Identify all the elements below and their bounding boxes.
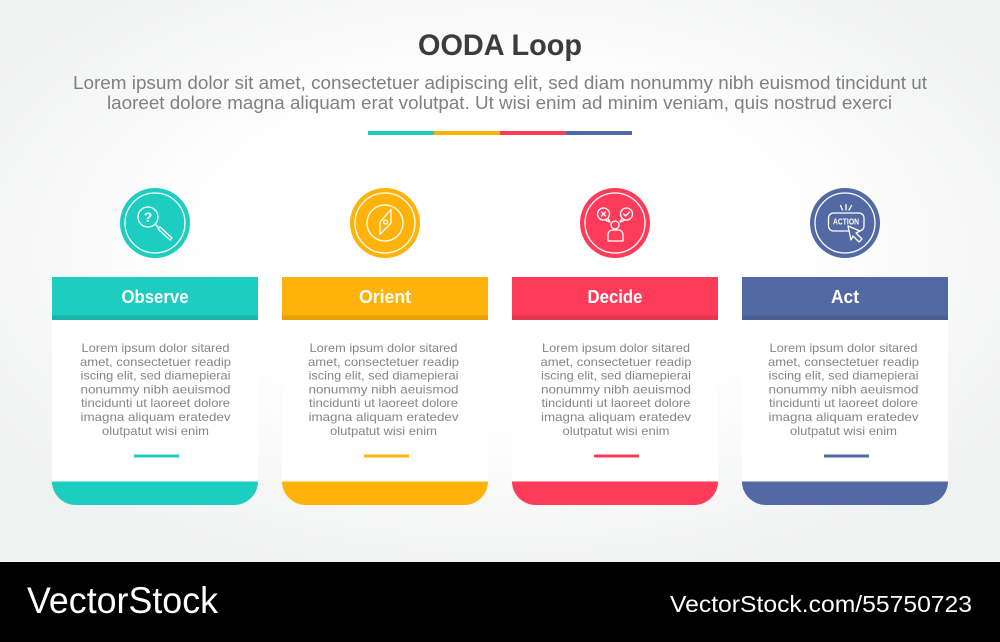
card text: nonummy nibh aeuismod bbox=[308, 382, 458, 396]
card text bbox=[80, 341, 231, 438]
subtitle text: Lorem ipsum dolor sit amet, consectetuer adipiscing elit, sed diam nonummy nibh euismod tincidunt ut bbox=[73, 73, 927, 93]
watermark footer bar: VectorStock.com/55750723 bbox=[670, 591, 972, 617]
card text: iscing elit, sed diamepierai bbox=[768, 369, 918, 383]
short accent line bbox=[134, 454, 179, 458]
card text: nonummy nibh aeuismod bbox=[541, 382, 691, 396]
panel: Observe bbox=[52, 188, 258, 505]
short accent line bbox=[364, 454, 409, 458]
card text: nonummy nibh aeuismod bbox=[80, 382, 230, 396]
card text: imagna aliquam eratedev bbox=[80, 410, 230, 424]
multicolour title underline bbox=[368, 131, 632, 135]
title: OODA Loop bbox=[418, 29, 582, 62]
card text: olutpatut wisi enim bbox=[562, 424, 670, 438]
card header: Observe bbox=[122, 287, 188, 307]
card footer bbox=[282, 482, 488, 505]
card text: olutpatut wisi enim bbox=[330, 424, 437, 438]
card text: amet, consectetuer readip bbox=[768, 355, 919, 369]
panel: Decide bbox=[512, 188, 718, 505]
card text: iscing elit, sed diamepierai bbox=[541, 369, 691, 383]
card text: imagna aliquam eratedev bbox=[541, 410, 691, 424]
card text: tincidunti ut laoreet dolore bbox=[309, 396, 458, 410]
card footer bbox=[512, 482, 718, 505]
card text: imagna aliquam eratedev bbox=[768, 410, 918, 424]
card header: Decide bbox=[588, 287, 642, 307]
card header bbox=[742, 277, 948, 320]
card text: Lorem ipsum dolor sitared bbox=[542, 341, 690, 355]
card text: iscing elit, sed diamepierai bbox=[80, 369, 230, 383]
subtitle text: laoreet dolore magna aliquam erat volutpat. Ut wisi enim ad minim veniam, quis nostrud exerci bbox=[107, 93, 892, 113]
card header bbox=[52, 277, 258, 320]
icon: magnifying glass with question mark: ? bbox=[144, 209, 152, 225]
short accent line bbox=[824, 454, 869, 458]
card text: tincidunti ut laoreet dolore bbox=[542, 396, 691, 410]
panel: Act bbox=[742, 188, 948, 505]
card footer bbox=[52, 482, 258, 505]
icon: person with two decision bubbles bbox=[580, 188, 650, 258]
short accent line bbox=[594, 454, 639, 458]
card text: Lorem ipsum dolor sitared bbox=[310, 341, 458, 355]
icon: magnifying glass with question mark bbox=[120, 188, 190, 258]
card text bbox=[768, 341, 919, 438]
card text bbox=[308, 341, 459, 438]
subtitle text bbox=[73, 73, 927, 113]
card text: amet, consectetuer readip bbox=[540, 355, 692, 369]
card text: tincidunti ut laoreet dolore bbox=[81, 396, 230, 410]
card header: Act bbox=[831, 287, 859, 307]
watermark footer bar: VectorStock bbox=[27, 580, 218, 621]
card footer bbox=[742, 482, 948, 505]
card header: Orient bbox=[359, 287, 411, 307]
icon: action button with cursor bbox=[810, 188, 880, 258]
icon: action button with cursor: ACTION bbox=[833, 218, 859, 226]
card header bbox=[512, 277, 718, 320]
card header bbox=[282, 277, 488, 320]
icon: compass bbox=[350, 188, 420, 258]
card text: amet, consectetuer readip bbox=[308, 355, 459, 369]
card body bbox=[512, 320, 718, 505]
card body bbox=[52, 320, 258, 505]
card body bbox=[282, 320, 488, 505]
watermark footer bar bbox=[0, 562, 1000, 642]
card text: amet, consectetuer readip bbox=[80, 355, 231, 369]
card text: tincidunti ut laoreet dolore bbox=[769, 396, 918, 410]
card text: iscing elit, sed diamepierai bbox=[308, 369, 458, 383]
card text: Lorem ipsum dolor sitared bbox=[770, 341, 918, 355]
card text: imagna aliquam eratedev bbox=[308, 410, 458, 424]
panel: Orient bbox=[282, 188, 488, 505]
card text: olutpatut wisi enim bbox=[790, 424, 897, 438]
card text: olutpatut wisi enim bbox=[102, 424, 209, 438]
card text bbox=[540, 341, 692, 438]
card body bbox=[742, 320, 948, 505]
card text: Lorem ipsum dolor sitared bbox=[82, 341, 230, 355]
card text: nonummy nibh aeuismod bbox=[768, 382, 918, 396]
